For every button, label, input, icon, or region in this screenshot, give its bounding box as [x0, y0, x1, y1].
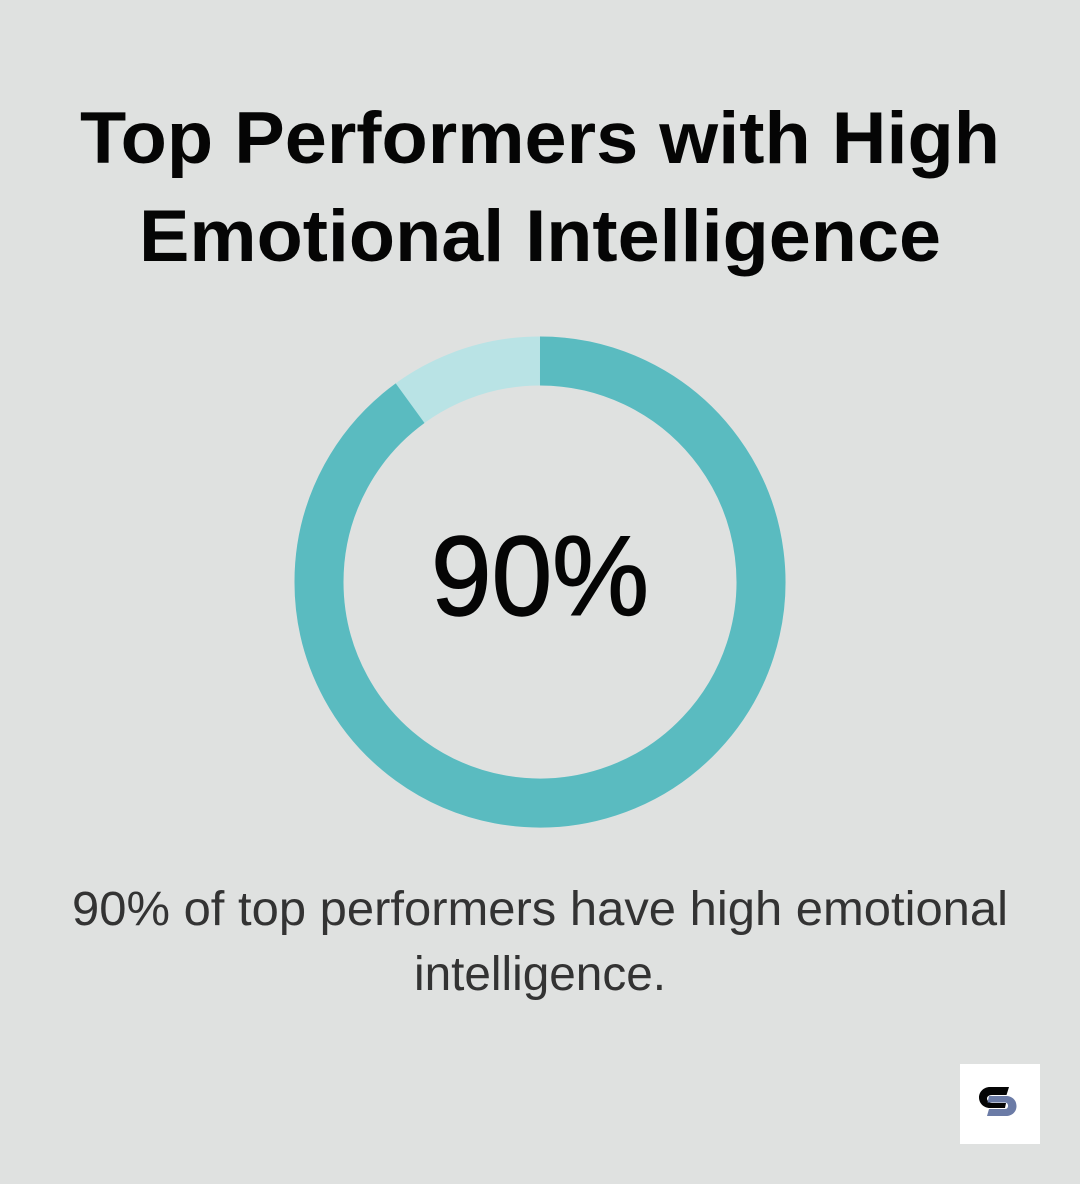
icon: logo mark: [979, 1087, 1016, 1116]
description: intelligence.: [414, 948, 666, 1001]
donut chart: 90%: [319, 361, 761, 803]
description: 90% of top performers have high emotional: [72, 883, 1008, 936]
title: Emotional Intelligence: [139, 196, 941, 277]
ring track: remaining 10%: [319, 361, 761, 803]
description: [72, 883, 1008, 1001]
title: [80, 98, 1000, 277]
ring value: 90% arc: [319, 361, 761, 803]
center value: 90%: [431, 513, 649, 639]
logo badge: [960, 1064, 1040, 1144]
title: Top Performers with High: [80, 98, 1000, 179]
